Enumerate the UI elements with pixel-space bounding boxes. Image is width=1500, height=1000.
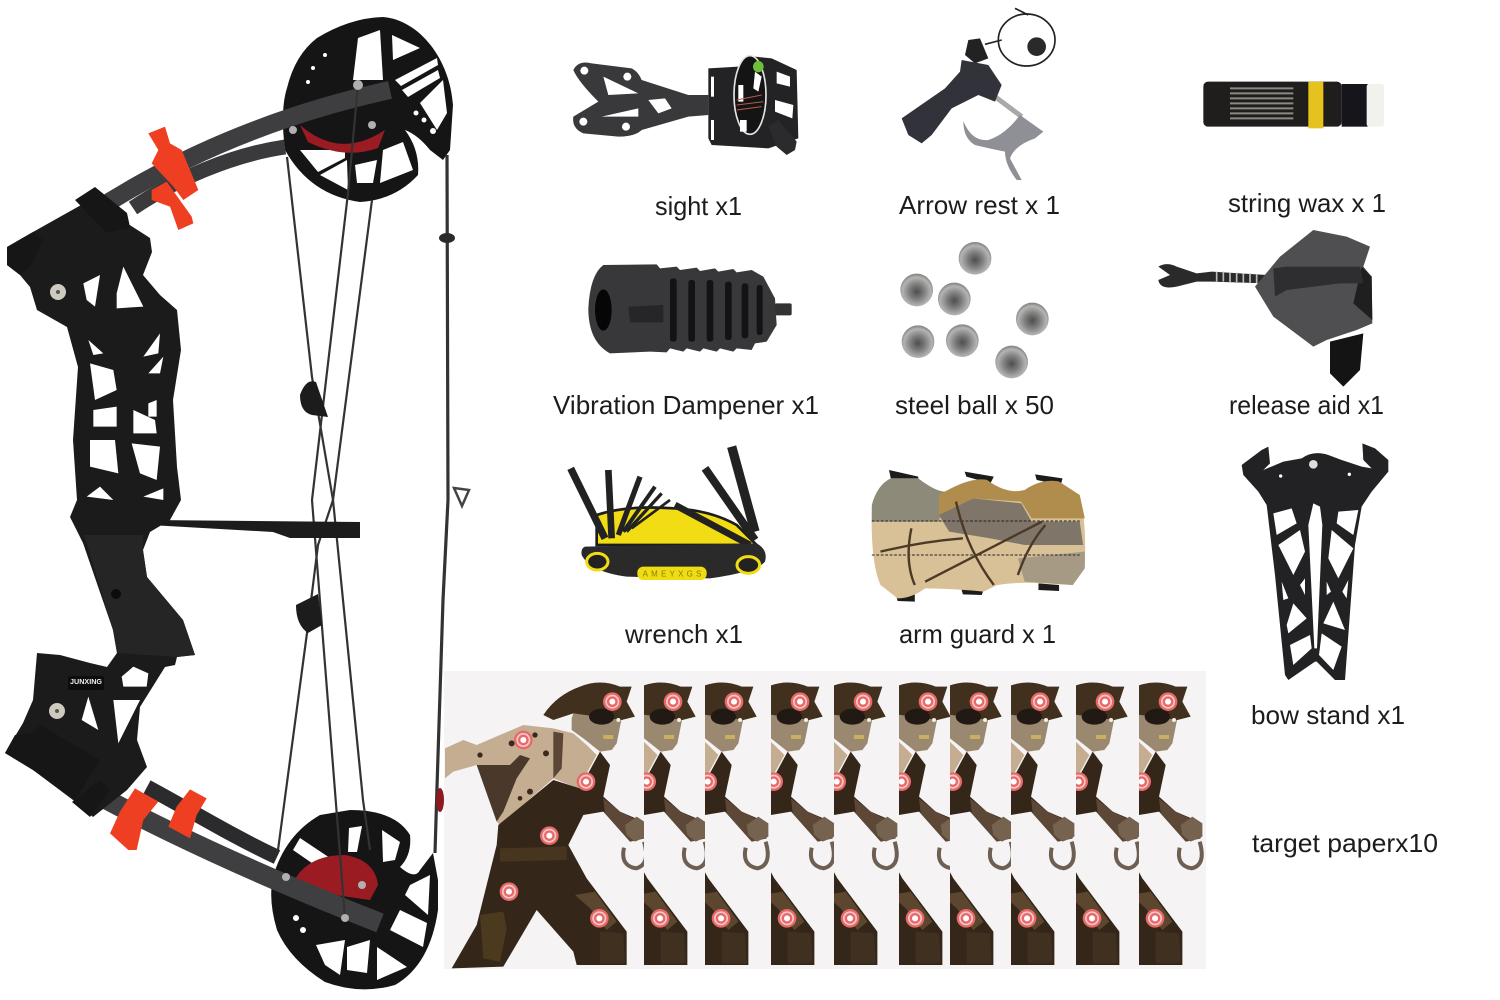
label: arrow rest: Arrow rest x 1 (899, 190, 1060, 220)
string details (296, 233, 469, 812)
label: vibration dampener: Vibration Dampener x1 (553, 390, 819, 420)
icon: arm guard (872, 470, 1085, 602)
label: arm guard: arm guard x 1 (899, 619, 1056, 649)
icon: wrench: AMEYXGS (643, 569, 701, 578)
upper cam (283, 17, 453, 202)
icon: string wax (1203, 82, 1384, 128)
riser brand badge (68, 676, 104, 690)
cam red module (292, 855, 378, 900)
limb pockets (5, 187, 130, 817)
icon: steel balls (900, 242, 1049, 378)
icon: arrow rest (902, 8, 1055, 180)
bow strings and cables (278, 85, 448, 918)
cam bolts (282, 80, 376, 922)
icon: sight (573, 56, 798, 155)
target sheet background (444, 671, 1206, 969)
label: sight: sight x1 (655, 191, 742, 221)
label: release aid: release aid x1 (1229, 390, 1384, 420)
sight shelf (150, 520, 360, 538)
stacked target sheets (506, 682, 1202, 968)
compound bow (5, 17, 469, 989)
target papers (444, 671, 1206, 969)
label: target paper: target paperx10 (1252, 828, 1438, 858)
label: bow stand: bow stand x1 (1251, 700, 1405, 730)
icon: wrench (571, 447, 766, 580)
label: string wax: string wax x 1 (1228, 188, 1386, 218)
main zombie target (445, 682, 644, 968)
lower cam (271, 810, 438, 989)
riser brand badge: JUNXING (70, 679, 103, 686)
icon: vibration dampener (588, 264, 792, 353)
icon: bow stand (1242, 443, 1388, 680)
upper limbs (45, 90, 390, 245)
icon: release aid (1158, 230, 1372, 387)
riser (5, 187, 195, 817)
upper limb dampers (148, 127, 198, 230)
label: steel ball: steel ball x 50 (895, 390, 1054, 420)
label: wrench: wrench x1 (624, 619, 743, 649)
lower limb dampers (110, 788, 207, 850)
cam red module (300, 125, 385, 153)
lower limbs (33, 757, 380, 923)
